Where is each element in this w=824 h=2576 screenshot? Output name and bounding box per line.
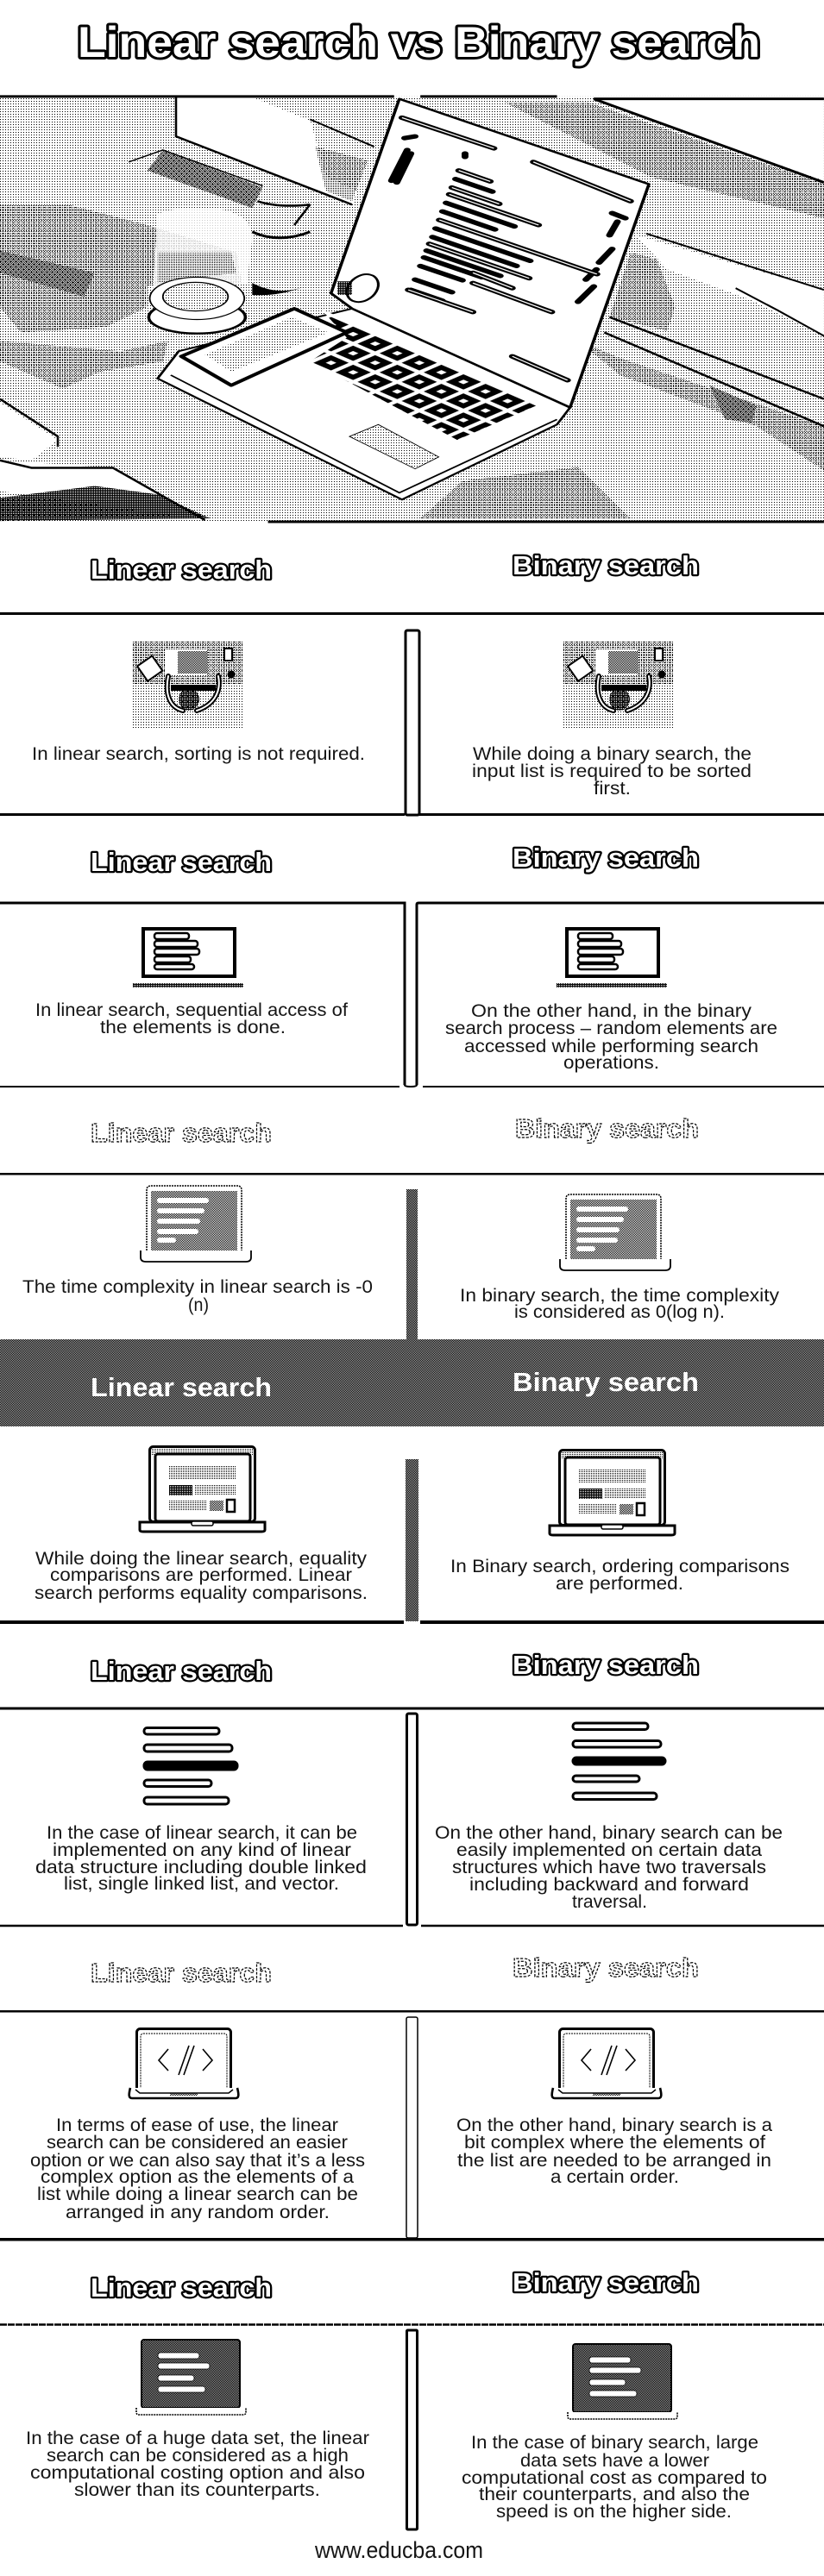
text: linear data structures <box>35 1822 367 1894</box>
icon: monitor with list, left <box>133 929 243 987</box>
heading: Binary search: Binary search <box>513 843 699 873</box>
text: binary data structures: easily implemented on certain data <box>456 1840 762 1860</box>
text: binary data structures: including backward and forward <box>469 1874 749 1895</box>
text: linear large data: search can be considered as a high <box>47 2445 349 2466</box>
icon: laptop with code, left <box>129 2028 238 2098</box>
icon: hand holding phone, left <box>133 642 242 730</box>
text: linear large data <box>26 2428 369 2500</box>
text: binary comparisons: are performed. <box>556 1573 683 1594</box>
text: linear sorting: In linear search, sorting is not required. <box>32 743 365 764</box>
text: binary comparisons: In Binary search, ordering comparisons <box>450 1556 789 1576</box>
text: binary ease of use <box>456 2115 772 2187</box>
icon: dark laptop, right <box>568 2344 677 2419</box>
text: linear data structures: data structure including double linked <box>35 1857 367 1877</box>
divider <box>407 2330 418 2529</box>
text: binary access <box>445 1000 777 1073</box>
text: binary large data: speed is on the higher side. <box>496 2501 732 2522</box>
text: linear comparisons: While doing the linear search, equality <box>35 1548 367 1569</box>
text: binary time complexity: In binary search, the time complexity <box>460 1285 779 1306</box>
heading: Binary search: Binary search <box>513 1952 699 1983</box>
text: linear ease of use: option or we can also say that it’s a less <box>30 2150 365 2171</box>
row 4 header band <box>0 1339 824 1426</box>
text: linear ease of use: In terms of ease of use, the linear <box>56 2115 338 2135</box>
text: linear access <box>35 1000 348 1037</box>
heading: Linear search: Linear search <box>91 555 272 585</box>
footer url: www.educba.com <box>314 2537 483 2563</box>
icon: list bars, right <box>573 1723 665 1799</box>
icon: grey laptop, right <box>560 1194 670 1270</box>
text: binary data structures <box>435 1822 783 1912</box>
text: linear time complexity <box>22 1276 373 1315</box>
heading: Linear search: Linear search <box>91 1958 272 1988</box>
text: binary access: accessed while performing search <box>464 1036 758 1056</box>
text: binary access: On the other hand, in the binary <box>471 1000 752 1021</box>
text: binary comparisons <box>450 1556 789 1594</box>
text: binary sorting: input list is required to be sorted <box>472 761 752 781</box>
text: binary ease of use: a certain order. <box>550 2166 679 2187</box>
text: linear time complexity: The time complexity in linear search is -0 <box>22 1276 373 1297</box>
text: binary large data: computational cost as compared to <box>462 2467 767 2488</box>
hero photo: laptop on a desk <box>0 97 824 522</box>
text: binary ease of use: On the other hand, binary search is a <box>456 2115 772 2135</box>
text: binary data structures: traversal. <box>572 1891 647 1912</box>
text: linear comparisons: comparisons are performed. Linear <box>50 1564 352 1585</box>
heading: Linear search: Linear search <box>91 1118 272 1148</box>
text: binary sorting: first. <box>594 778 631 799</box>
divider <box>406 1459 418 1621</box>
row 2: access <box>0 843 824 1087</box>
icon: laptop with code, right <box>552 2028 661 2098</box>
text: binary large data <box>462 2432 767 2522</box>
icon: laptop with panels, left <box>140 1447 265 1532</box>
text: linear ease of use: arranged in any random order. <box>66 2202 330 2222</box>
icon: grey laptop, left <box>141 1186 251 1262</box>
icon: monitor with list, right <box>557 929 667 987</box>
text: binary large data: data sets have a lower <box>520 2450 709 2471</box>
divider <box>406 2017 418 2238</box>
row 6: ease of use <box>0 1952 824 2241</box>
divider <box>406 630 419 815</box>
row 5: data structures <box>0 1650 824 1926</box>
title: Linear search vs Binary search <box>78 18 760 66</box>
heading: Linear search: Linear search <box>91 1372 272 1402</box>
text: binary sorting: While doing a binary search, the <box>473 743 752 764</box>
text: linear ease of use <box>30 2115 365 2222</box>
row 7: large data sets <box>0 2267 824 2529</box>
icon: list bars, left <box>144 1728 237 1804</box>
heading: Binary search: Binary search <box>513 550 699 580</box>
text: linear time complexity: (n) <box>188 1294 209 1315</box>
text: linear large data: slower than its counterparts. <box>74 2479 320 2500</box>
text: linear ease of use: complex option as the elements of a <box>41 2166 354 2187</box>
heading: Binary search: Binary search <box>513 1650 699 1680</box>
icon: dark laptop, left <box>136 2340 246 2415</box>
text: binary time complexity: is considered as 0(log n). <box>514 1301 725 1322</box>
text: linear large data: computational costing option and also <box>30 2462 365 2483</box>
text: linear ease of use: list while doing a linear search can be <box>37 2184 358 2204</box>
text: binary data structures: structures which have two traversals <box>452 1857 766 1877</box>
heading: Linear search: Linear search <box>91 1656 272 1686</box>
icon: hand holding phone, right <box>563 642 673 730</box>
text: linear data structures: In the case of linear search, it can be <box>47 1822 357 1843</box>
text: binary time complexity <box>460 1285 779 1322</box>
heading: Binary search: Binary search <box>513 2267 699 2297</box>
text: binary access: search process – random elements are <box>445 1018 777 1038</box>
text: linear access: the elements is done. <box>100 1017 286 1037</box>
text: binary ease of use: bit complex where the elements of <box>464 2132 765 2153</box>
heading: Binary search: Binary search <box>515 1113 699 1144</box>
heading: Linear search: Linear search <box>91 847 272 877</box>
text: linear ease of use: search can be considered an easier <box>47 2132 348 2153</box>
text: binary data structures: On the other hand, binary search can be <box>435 1822 783 1843</box>
text: linear comparisons: search performs equality comparisons. <box>35 1583 368 1603</box>
text: linear large data: In the case of a huge data set, the linear <box>26 2428 369 2448</box>
heading: Binary search: Binary search <box>513 1367 699 1397</box>
text: linear comparisons <box>35 1548 368 1603</box>
row 4: comparisons <box>0 1447 824 1622</box>
divider <box>406 1189 418 1340</box>
divider <box>407 1714 418 1925</box>
row 3: time complexity <box>0 1113 824 1340</box>
text: linear data structures: list, single linked list, and vector. <box>64 1873 339 1894</box>
text: binary access: operations. <box>563 1052 659 1073</box>
heading: Linear search: Linear search <box>91 2272 272 2303</box>
text: linear access: In linear search, sequential access of <box>35 1000 348 1020</box>
text: binary sorting <box>472 743 752 799</box>
text: linear data structures: implemented on any kind of linear <box>53 1840 351 1860</box>
text: binary large data: In the case of binary search, large <box>471 2432 758 2453</box>
icon: laptop with panels, right <box>550 1451 675 1535</box>
text: binary ease of use: the list are needed to be arranged in <box>457 2150 771 2171</box>
row 1: sorting <box>0 550 824 815</box>
text: binary large data: their counterparts, and also the <box>479 2484 750 2504</box>
